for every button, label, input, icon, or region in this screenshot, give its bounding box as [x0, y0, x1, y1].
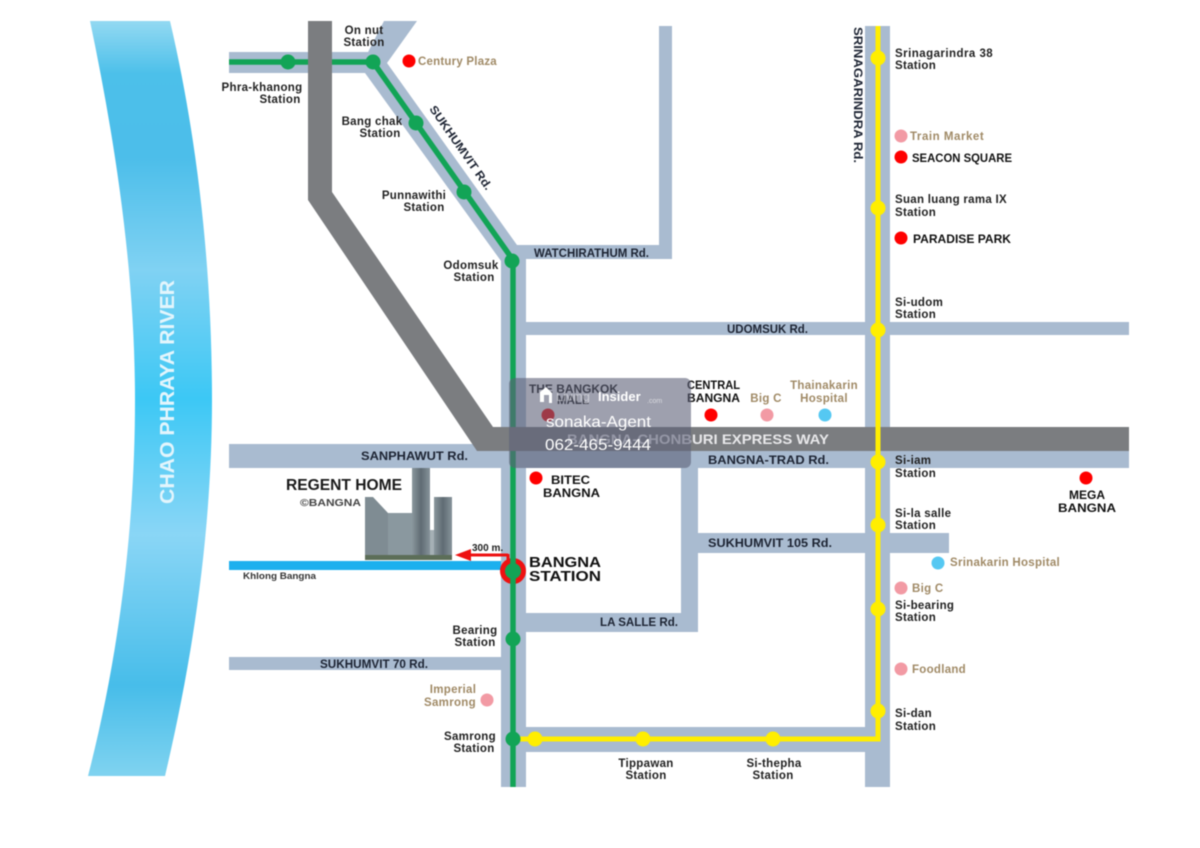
road labels: SUKHUMVIT 70 Rd.	[320, 659, 428, 671]
station labels: Si-dan	[895, 708, 932, 720]
station labels	[222, 25, 1007, 782]
Bangna station label: BANGNA	[529, 555, 602, 571]
project title: ©BANGNA	[300, 497, 361, 509]
road labels: SUKHUMVIT 105 Rd.	[708, 538, 832, 550]
points of interest: Samrong	[424, 697, 476, 709]
station labels: Srinagarindra 38	[895, 48, 993, 60]
road labels: UDOMSUK Rd.	[727, 324, 808, 336]
station labels: Si-iam	[895, 455, 931, 467]
yellow stations	[528, 50, 886, 746]
points of interest: MALL	[557, 395, 589, 407]
road labels: Khlong Bangna	[243, 571, 317, 581]
points of interest: BANGNA	[687, 393, 740, 405]
station labels: Station	[752, 770, 794, 782]
station labels: Station	[895, 309, 936, 321]
watermark panel: Living	[556, 389, 590, 404]
Bangna station label: STATION	[529, 569, 601, 585]
station labels: Si-bearing	[895, 600, 954, 612]
points of interest: Hospital	[800, 393, 848, 405]
distance arrow: 300 m.	[455, 543, 508, 562]
green stations	[280, 54, 520, 746]
expressway label: BANGNA-CHONBURI EXPRESS WAY	[567, 431, 830, 447]
watermark panel: sonaka-Agent	[546, 414, 652, 431]
station labels: Station	[895, 520, 936, 532]
points of interest: SEACON SQUARE	[912, 151, 1012, 165]
points of interest: PARADISE PARK	[913, 232, 1011, 246]
station labels: Tippawan	[618, 758, 674, 770]
station labels: Station	[453, 743, 495, 755]
station labels: On nut	[345, 25, 383, 37]
station labels: Station	[895, 207, 936, 219]
station labels: Punnawithi	[382, 190, 446, 202]
yellow rail line	[513, 26, 878, 739]
Bangna station label	[529, 555, 602, 585]
watermark panel	[509, 378, 691, 468]
points of interest: Srinakarin Hospital	[950, 557, 1060, 569]
points of interest: Century Plaza	[418, 56, 497, 68]
station labels: Station	[895, 60, 936, 72]
station labels: Samrong	[444, 731, 496, 743]
station labels: Station	[453, 272, 495, 284]
points of interest: Train Market	[910, 131, 984, 143]
station labels: Station	[625, 770, 667, 782]
station labels: Station	[895, 612, 936, 624]
Bangna station ring	[502, 560, 524, 582]
road labels: LA SALLE Rd.	[600, 617, 678, 629]
station labels: Station	[895, 721, 936, 733]
points of interest: Foodland	[912, 664, 966, 676]
points of interest: CENTRAL	[687, 380, 740, 392]
river: Chao Phraya	[88, 21, 212, 776]
points of interest: BITEC	[551, 473, 590, 487]
road labels: SANPHAWUT Rd.	[361, 451, 468, 463]
road labels: WATCHIRATHUM Rd.	[534, 248, 649, 260]
canal: Khlong Bangna	[229, 561, 501, 570]
station labels: Station	[343, 37, 385, 49]
green rail line	[229, 62, 513, 787]
points of interest: MEGA	[1069, 488, 1105, 502]
icon: watermark logo	[540, 387, 552, 403]
road labels: SUKHUMVIT Rd.	[427, 104, 494, 193]
road labels: SRINAGARINDRA Rd.	[851, 27, 863, 163]
station labels: Suan luang rama IX	[895, 194, 1007, 206]
station labels: Station	[895, 468, 936, 480]
project title	[286, 477, 402, 509]
watermark panel: .com	[647, 398, 662, 405]
watermark panel: 062-465-9444	[545, 437, 651, 454]
station labels: Odomsuk	[443, 260, 499, 272]
station labels: Phra-khanong	[222, 82, 302, 94]
points of interest	[402, 54, 1116, 709]
expressway	[308, 21, 1129, 451]
station labels: Station	[403, 202, 445, 214]
points of interest: Imperial	[430, 684, 476, 696]
distance arrow: 300 m.: 300 m.	[472, 543, 503, 554]
points of interest: THE BANGKOK	[529, 384, 619, 396]
watermark panel: Insider	[598, 389, 641, 404]
road labels	[243, 27, 863, 671]
points of interest: Big C	[912, 583, 944, 595]
points of interest: Thainakarin	[790, 380, 858, 392]
icon: Regent Home towers	[365, 468, 452, 560]
station labels: Bang chak	[342, 116, 403, 128]
station labels: Station	[359, 128, 401, 140]
project title: REGENT HOME	[286, 477, 402, 494]
river label: CHAO PHRAYA RIVER	[157, 279, 179, 504]
station labels: Si-la salle	[895, 508, 951, 520]
station labels: Si-udom	[895, 297, 943, 309]
road network	[229, 21, 1129, 787]
station labels: Station	[454, 637, 496, 649]
station labels: Station	[259, 94, 301, 106]
station labels: Bearing	[453, 625, 497, 637]
station labels: Si-thepha	[746, 758, 802, 770]
road labels: BANGNA-TRAD Rd.	[708, 455, 829, 467]
points of interest: BANGNA	[1058, 501, 1116, 515]
points of interest: Big C	[750, 393, 782, 405]
points of interest: BANGNA	[543, 486, 600, 500]
